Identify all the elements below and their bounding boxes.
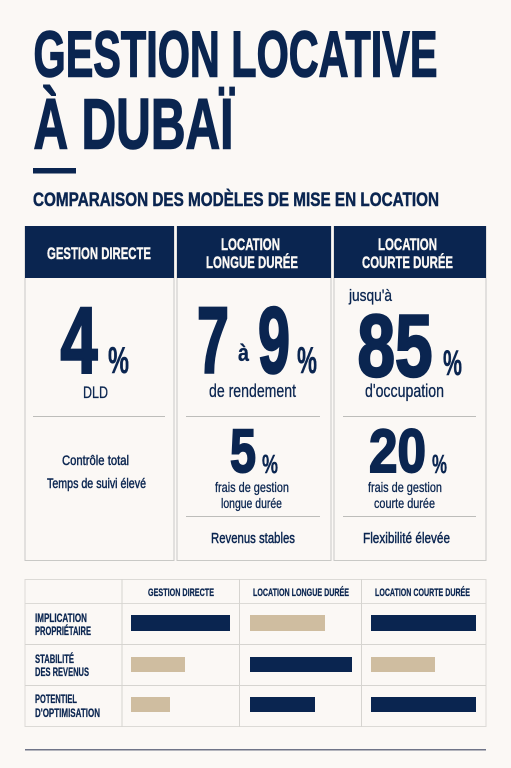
stat: 4 % DLD: DLD (83, 383, 108, 402)
stat: 20 % frais de gestion: frais de gestion (368, 479, 442, 495)
row: implication propriétaire (35, 611, 476, 638)
header: location longue durée: LONGUE DURÉE (206, 253, 298, 272)
stat: 4 % DLD: 4 (60, 288, 98, 392)
row: stabilité des revenus: DES REVENUS (35, 665, 89, 679)
title (34, 19, 438, 165)
row: stabilité des revenus: STABILITÉ (35, 651, 74, 666)
table header row (148, 586, 470, 599)
row: potentiel d'optimisation (35, 692, 476, 720)
stat: jusqu'à 85 % d'occupation: % (443, 344, 462, 383)
stat: 7 à 9 % de rendement: à (238, 340, 250, 367)
text: gestion directe notes: Contrôle total (62, 452, 129, 468)
header: location longue durée (177, 226, 331, 278)
title accent bar (33, 168, 76, 174)
stat: 5 % frais de gestion: frais de gestion (215, 479, 289, 495)
header: gestion directe: GESTION DIRECTE (47, 245, 151, 263)
stat: 7 à 9 % de rendement (197, 288, 317, 401)
stat: 20 % frais de gestion: % (432, 449, 447, 479)
stat: 7 à 9 % de rendement: de rendement (209, 381, 296, 401)
table header row: LOCATION LONGUE DURÉE (253, 586, 349, 599)
stat: 7 à 9 % de rendement: % (297, 340, 317, 381)
row: potentiel d'optimisation: POTENTIEL (35, 692, 77, 706)
stat: 7 à 9 % de rendement: 9 (258, 288, 290, 392)
row: implication propriétaire: PROPRIÉTAIRE (35, 623, 91, 638)
stat: 20 % frais de gestion: 20 (369, 417, 426, 486)
row: potentiel d'optimisation: D'OPTIMISATION (35, 706, 100, 720)
header: location courte durée: COURTE DURÉE (362, 253, 453, 272)
text: flexibilité élevée: Flexibilité élevée (363, 530, 450, 547)
stat: jusqu'à 85 % d'occupation: 85 (358, 296, 432, 395)
text: gestion directe notes (47, 452, 146, 491)
panel: location longue durée (177, 226, 331, 560)
stat: 4 % DLD (60, 288, 129, 402)
table header row: GESTION DIRECTE (148, 587, 214, 599)
stat: 5 % frais de gestion: longue durée (221, 495, 282, 511)
stat: 5 % frais de gestion: 5 (230, 417, 256, 486)
stat: 20 % frais de gestion (368, 417, 447, 511)
row: implication propriétaire: IMPLICATION (35, 611, 87, 625)
stat: 20 % frais de gestion: courte durée (374, 495, 435, 511)
stat: jusqu'à 85 % d'occupation: d'occupation (365, 381, 444, 401)
stat: 7 à 9 % de rendement: 7 (197, 288, 229, 392)
text: revenus stables: Revenus stables (211, 530, 295, 547)
panel: gestion directe (25, 226, 174, 560)
text: gestion directe notes: Temps de suivi élevé (47, 475, 146, 491)
footer rule (25, 749, 486, 750)
header: gestion directe (25, 226, 174, 278)
stat: 5 % frais de gestion: % (262, 449, 278, 479)
row: stabilité des revenus (35, 651, 435, 679)
header: location courte durée: LOCATION (378, 236, 437, 254)
comparison table (25, 579, 486, 727)
header: location courte durée (334, 226, 486, 278)
stat: 4 % DLD: % (108, 340, 129, 381)
header: location longue durée: LOCATION (221, 236, 280, 254)
panel: location courte durée (334, 226, 486, 560)
title: À DUBAÏ (34, 85, 235, 165)
stat: 5 % frais de gestion (215, 417, 289, 511)
stat: jusqu'à 85 % d'occupation: jusqu'à (348, 286, 392, 305)
